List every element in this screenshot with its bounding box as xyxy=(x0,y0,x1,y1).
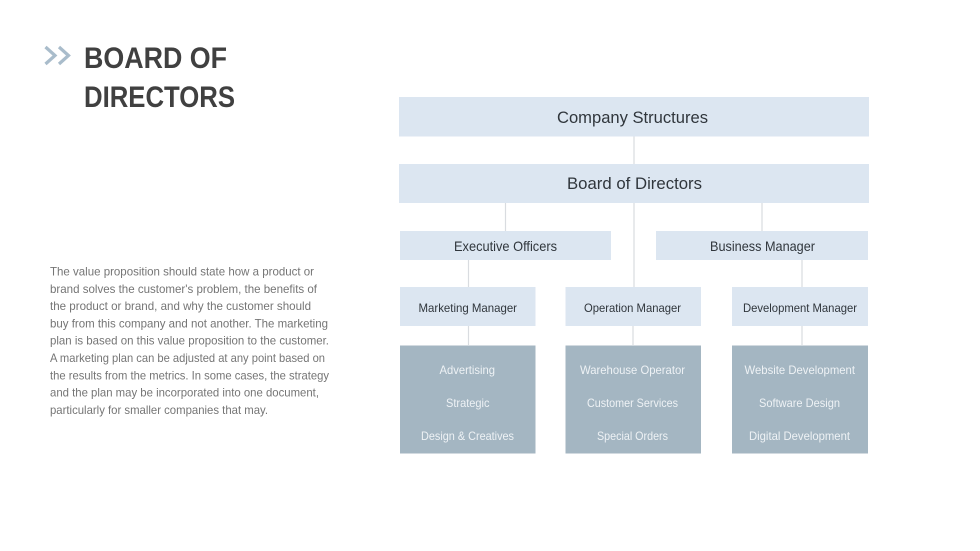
body paragraph: the results from the metrics. In some cases, the strategy xyxy=(50,368,329,382)
panel: development teams: Software Design xyxy=(759,396,840,410)
box: Development Manager xyxy=(732,287,868,326)
panel: operation teams: Special Orders xyxy=(597,429,668,443)
box: Company Structures: Company Structures xyxy=(557,108,708,127)
box: Executive Officers: Executive Officers xyxy=(454,238,557,254)
panel: marketing teams: Advertising xyxy=(440,363,495,377)
box: Operation Manager xyxy=(566,287,701,326)
box: Business Manager: Business Manager xyxy=(710,238,815,254)
title xyxy=(84,42,235,114)
body paragraph: brand solves the customer's problem, the benefits of xyxy=(50,282,318,296)
body paragraph: and the plan may be incorporated into one document, xyxy=(50,386,319,400)
body paragraph: plan is based on this value proposition to the customer. xyxy=(50,334,329,348)
body paragraph: the product or brand, and why the customer should xyxy=(50,299,311,313)
title: BOARD OF xyxy=(84,42,227,75)
org chart connectors xyxy=(468,136,802,345)
box: Board of Directors xyxy=(399,164,869,203)
box: Development Manager: Development Manager xyxy=(743,301,857,315)
panel: marketing teams: Strategic xyxy=(446,396,490,410)
panel: development teams: Website Development xyxy=(744,363,856,377)
body paragraph: buy from this company and not another. The marketing xyxy=(50,316,328,330)
panel: marketing teams: Design & Creatives xyxy=(421,429,514,443)
body paragraph: particularly for smaller companies that may. xyxy=(50,403,268,417)
body paragraph: A marketing plan can be adjusted at any point based on xyxy=(50,351,325,365)
panel: development teams xyxy=(732,346,868,454)
box: Board of Directors: Board of Directors xyxy=(567,174,702,193)
panel: operation teams: Customer Services xyxy=(587,396,678,410)
body paragraph xyxy=(50,264,329,417)
icon: double chevron xyxy=(46,47,68,64)
box: Marketing Manager: Marketing Manager xyxy=(418,301,517,315)
box: Business Manager xyxy=(656,231,868,260)
panel: marketing teams xyxy=(400,346,536,454)
panel: operation teams: Warehouse Operator xyxy=(580,363,685,377)
title: DIRECTORS xyxy=(84,81,235,114)
panel: operation teams xyxy=(566,346,701,454)
box: Executive Officers xyxy=(400,231,611,260)
panel: development teams: Digital Development xyxy=(749,429,851,443)
box: Operation Manager: Operation Manager xyxy=(584,301,681,315)
box: Marketing Manager xyxy=(400,287,536,326)
body paragraph: The value proposition should state how a product or xyxy=(50,264,314,278)
box: Company Structures xyxy=(399,97,869,136)
